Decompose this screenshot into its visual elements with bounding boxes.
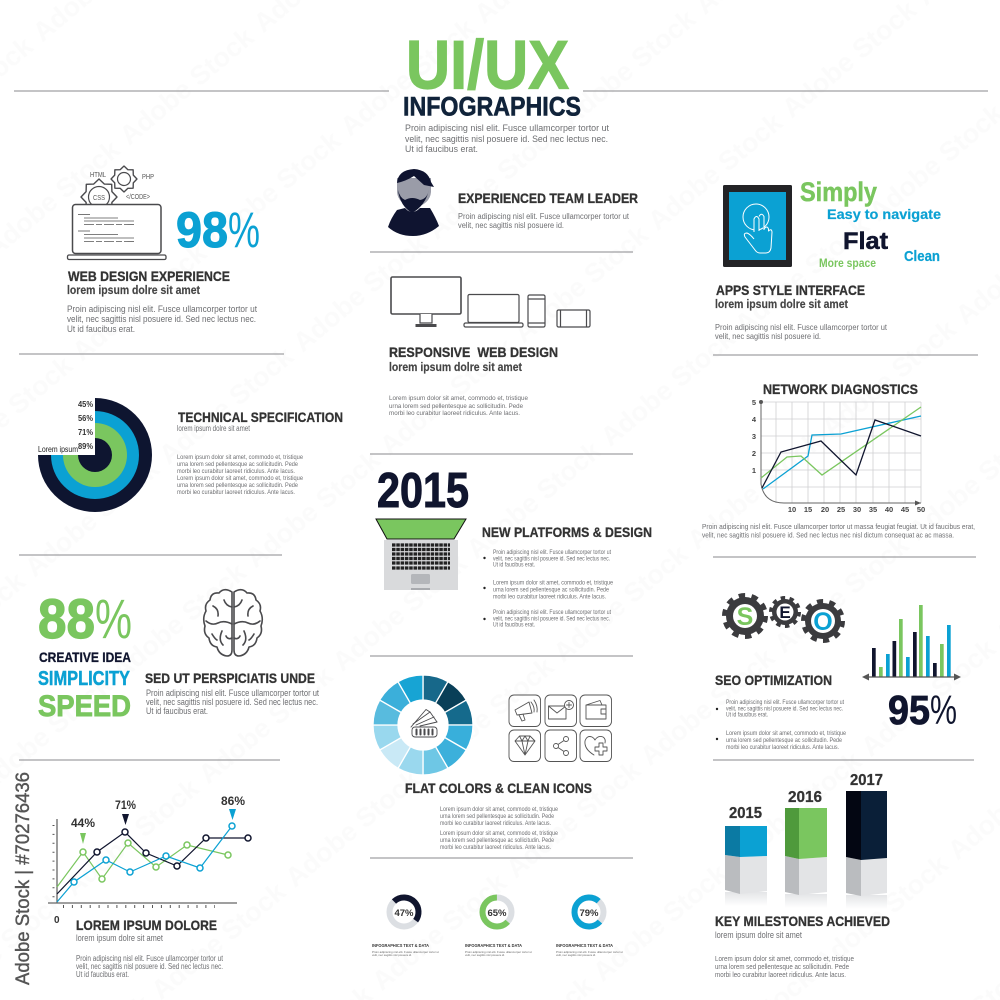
icon: devices: [391, 277, 590, 327]
intro text: velit, nec sagittis nisl posuere id. Sed nec lectus nec.: [405, 134, 608, 144]
ring: 47%: [372, 892, 439, 957]
heading: [715, 913, 890, 940]
text block: Lorem ipsum dolor sit amet, commodo et, tristique: [389, 395, 528, 402]
bullet list: [716, 700, 847, 751]
bullet list: Ut id faucibus erat.: [493, 562, 535, 568]
icon: mail plus: [545, 695, 576, 726]
line chart: [752, 398, 925, 514]
panel: creative stats: [38, 587, 319, 723]
bullet list: morbi leo curabitur laoreet ridiculus. Ante lacus.: [726, 745, 839, 751]
line chart: 45: [901, 505, 909, 514]
stat: 98%: %: [228, 202, 260, 258]
stat: 98%: [176, 202, 260, 258]
text block: Lorem ipsum dolor sit amet, commodo et, tristique: [715, 956, 854, 963]
word cloud: Clean: [904, 248, 940, 265]
icon: SEO gears: O: [813, 608, 833, 636]
year 2015: 2015: [377, 464, 469, 518]
line chart: 0: [54, 915, 60, 926]
panel: responsive web design: [389, 277, 590, 417]
icon: laptop with gears: CSS: [93, 195, 105, 202]
heading: lorem ipsum dolre sit amet: [67, 283, 200, 297]
word stack: SPEED: [38, 690, 131, 723]
icon: SEO gears: [724, 596, 842, 640]
word stack: SIMPLICITY: [38, 667, 130, 690]
line chart: 1: [752, 466, 756, 475]
bullet list: Ut id faucibus erat.: [493, 622, 535, 628]
text block: velit, nec sagittis nisl posuere id. Sed nec lectus nec nisl dictum consequat ac ac massa.: [702, 530, 954, 540]
icon: megaphone: [509, 695, 540, 726]
line chart: 86%: [221, 794, 245, 808]
text block: Proin adipiscing nisl elit. Fusce ullamcorper tortor ut: [458, 212, 630, 221]
bullet list: velit, nec sagittis nisl posuere id. Sed nec lectus nec.: [493, 616, 610, 622]
ring: 65%: [465, 891, 532, 957]
text block: urna lorem sed pellentesque ac sollicitudin. Pede: [715, 964, 849, 971]
icon: swatch fan: [411, 710, 437, 737]
bullet list: velit, nec sagittis nisl posuere id. Sed nec lectus nec.: [493, 556, 610, 562]
intro text: [405, 123, 609, 154]
text block: Ut id faucibus erat.: [67, 324, 135, 334]
panel: web design experience: [67, 166, 260, 334]
bullet list: velit, nec sagittis nisl posuere id. Sed nec lectus nec.: [726, 706, 843, 712]
line chart: 30: [853, 505, 861, 514]
radial chart: 56%: [78, 414, 93, 423]
text block: morbi leo curabitur laoreet ridiculus. Ante lacus.: [177, 468, 295, 475]
stat: 95%: 95: [888, 687, 930, 733]
icon: avatar: [388, 169, 439, 236]
icon: laptop with gears: [68, 166, 166, 260]
heading: EXPERIENCED TEAM LEADER: [458, 190, 638, 206]
word cloud: Flat: [843, 228, 888, 255]
text block: morbi leo curabitur laoreet ridiculus. Ante lacus.: [177, 489, 295, 496]
line chart: 71%: [115, 798, 136, 812]
heading: lorem ipsum dolre sit amet: [76, 933, 163, 943]
text block: urna lorem sed pellentesque ac sollicitudin. Pede: [440, 813, 554, 820]
icon: laptop with gears: </CODE>: [126, 194, 150, 201]
text block: [458, 212, 630, 230]
ring: 47%: Proin adipiscing nisl elit. Fusce ullamcorper tortor ut: [372, 950, 439, 954]
word stack: [38, 650, 131, 723]
stat: 88%: %: [95, 587, 132, 650]
panel: lorem ipsum dolore: [48, 794, 251, 979]
line chart: 44%: [71, 816, 95, 830]
text block: [440, 806, 558, 851]
radial chart: Lorem ipsum: [38, 445, 78, 454]
radial chart: 89%: [78, 442, 93, 451]
text block: [389, 395, 528, 417]
3D column: 2017: 2017: [850, 772, 883, 789]
ring: 47%: INFOGRAPHICS TEXT & DATA: [372, 943, 430, 948]
icon: share: [545, 730, 576, 762]
ring: 65%: 65%: [487, 908, 507, 919]
ring: 47%: velit, nec sagittis nisl posuere id.: [372, 953, 412, 957]
bullet list: Proin adipiscing nisl elit. Fusce ullamcorper tortor ut: [726, 700, 844, 706]
text block: Proin adipiscing nisl elit. Fusce ullamcorper tortor ut: [76, 954, 224, 963]
ring: 65%: Proin adipiscing nisl elit. Fusce ullamcorper tortor ut: [465, 950, 532, 954]
line chart: 10: [788, 505, 796, 514]
icon: heart plus: [580, 730, 612, 762]
intro text: Proin adipiscing nisl elit. Fusce ullamcorper tortor ut: [405, 123, 609, 133]
text block: Lorem ipsum dolor sit amet, commodo et, tristique: [440, 806, 558, 813]
panel: flat colors and clean icons: [367, 669, 612, 851]
text block: [715, 323, 888, 341]
word stack: CREATIVE IDEA: [39, 650, 131, 665]
ring: 65%: velit, nec sagittis nisl posuere id.: [465, 953, 505, 957]
heading: SED UT PERSPICIATIS UNDE: [145, 670, 315, 686]
text block: urna lorem sed pellentesque ac sollicitudin. Pede: [440, 837, 554, 844]
line chart: 4: [752, 415, 757, 424]
stat: 88%: [38, 587, 132, 650]
heading: TECHNICAL SPECIFICATION: [178, 409, 343, 425]
text block: [146, 688, 319, 716]
heading: lorem ipsum dolre sit amet: [177, 424, 251, 433]
3D column: 2016: [785, 789, 827, 908]
panel: key milestones: [715, 772, 890, 979]
icon: SEO gears: S: [737, 603, 753, 631]
heading: WEB DESIGN EXPERIENCE: [68, 268, 230, 284]
bullet list: [483, 550, 614, 628]
icon: laptop with gears: PHP: [142, 174, 154, 181]
radial chart: 45%: [78, 400, 93, 409]
heading: [389, 344, 558, 374]
heading: [67, 268, 230, 297]
line chart: 25: [837, 505, 845, 514]
text block: [177, 454, 303, 496]
line chart: [48, 794, 251, 926]
text block: Lorem ipsum dolor sit amet, commodo et, tristique: [177, 475, 303, 482]
intro text: Ut id faucibus erat.: [405, 144, 478, 154]
bullet list: urna lorem sed pellentesque ac sollicitudin. Pede: [726, 738, 843, 744]
stat: 88%: 88: [38, 587, 95, 650]
heading: lorem ipsum dolre sit amet: [715, 930, 802, 940]
3D column: 2015: [725, 805, 767, 906]
text block: morbi leo curabitur laoreet ridiculus. Ante lacus.: [715, 972, 846, 979]
radial chart: 71%: [78, 428, 93, 437]
panel: network diagnostics: [702, 381, 975, 540]
text block: velit, nec sagittis nisl posuere id. Sed nec lectus nec.: [146, 697, 318, 707]
line chart: 20: [821, 505, 829, 514]
text block: urna lorem sed pellentesque ac sollicitudin. Pede: [177, 461, 298, 468]
text block: Proin adipiscing nisl elit. Fusce ullamcorper tortor ut: [146, 688, 319, 698]
text block: velit, nec sagittis nisl posuere id. Sed nec lectus nec.: [67, 314, 256, 324]
heading: LOREM IPSUM DOLORE: [76, 917, 217, 933]
icon: open laptop: [376, 519, 466, 590]
stat: 98%: 98: [176, 202, 228, 258]
panel: experienced team leader: [388, 169, 638, 236]
text block: urna lorem sed pellentesque ac sollicitudin. Pede: [389, 403, 523, 410]
stat: 95%: [888, 687, 957, 733]
bar chart: [862, 605, 961, 680]
icon: wallet: [580, 695, 612, 726]
bullet list: Lorem ipsum dolor sit amet, commodo et, tristique: [493, 580, 614, 586]
panel: apps style interface: [715, 177, 941, 341]
bullet list: Proin adipiscing nisl elit. Fusce ullamcorper tortor ut: [493, 610, 611, 616]
heading: [76, 917, 217, 943]
title: INFOGRAPHICS: [403, 92, 581, 122]
text block: Lorem ipsum dolor sit amet, commodo et, tristique: [177, 454, 303, 461]
heading: NEW PLATFORMS & DESIGN: [482, 524, 652, 540]
bullet list: Proin adipiscing nisl elit. Fusce ullamcorper tortor ut: [493, 550, 611, 556]
bullet list: morbi leo curabitur laoreet ridiculus. Ante lacus.: [493, 594, 606, 600]
text block: morbi leo curabitur laoreet ridiculus. Ante lacus.: [440, 844, 551, 851]
word cloud: Simply: [800, 177, 877, 207]
heading: [715, 282, 865, 311]
line chart: 40: [885, 505, 893, 514]
text block: [702, 522, 975, 540]
heading: lorem ipsum dolre sit amet: [715, 297, 848, 311]
ring: 79%: INFOGRAPHICS TEXT & DATA: [556, 943, 614, 948]
text block: Ut id faucibus erat.: [146, 706, 208, 716]
heading: NETWORK DIAGNOSTICS: [763, 381, 918, 397]
ring: 79%: velit, nec sagittis nisl posuere id.: [556, 953, 596, 957]
heading: SEO OPTIMIZATION: [715, 672, 832, 688]
heading: [177, 409, 343, 433]
text block: [67, 304, 257, 334]
ring: 47%: 47%: [394, 908, 414, 919]
heading: KEY MILESTONES ACHIEVED: [715, 913, 890, 929]
text block: Proin adipiscing nisl elit. Fusce ullamcorper tortor ut: [67, 304, 257, 314]
3D column: 2015: 2015: [729, 805, 762, 822]
line chart: 50: [917, 505, 925, 514]
heading: lorem ipsum dolre sit amet: [389, 360, 522, 374]
line chart: 2: [752, 449, 756, 458]
text block: Ut id faucibus erat.: [76, 970, 129, 979]
heading: APPS STYLE INTERFACE: [716, 282, 865, 298]
title: UI/UX: [406, 26, 569, 104]
ring: 79%: Proin adipiscing nisl elit. Fusce ullamcorper tortor ut: [556, 950, 623, 954]
heading: RESPONSIVE WEB DESIGN: [389, 344, 558, 360]
heading: FLAT COLORS & CLEAN ICONS: [405, 780, 592, 796]
ring: 79%: 79%: [579, 908, 599, 919]
text block: [76, 954, 224, 979]
radial chart: [36, 396, 152, 512]
icon: laptop with gears: HTML: [90, 172, 106, 179]
icon: brain: [204, 590, 262, 656]
panel: new platforms and design: [376, 464, 652, 628]
panel: seo optimization: [715, 596, 961, 751]
word cloud: [800, 177, 941, 270]
text block: velit, nec sagittis nisl posuere id.: [715, 332, 821, 341]
line chart: 35: [869, 505, 877, 514]
icon: SEO gears: E: [779, 603, 791, 622]
line chart: 15: [804, 505, 812, 514]
text block: velit, nec sagittis nisl posuere id.: [458, 221, 564, 230]
text block: Proin adipiscing nisl elit. Fusce ullamcorper tortor ut: [715, 323, 888, 332]
stat: 95%: %: [930, 687, 957, 733]
text block: urna lorem sed pellentesque ac sollicitudin. Pede: [177, 482, 298, 489]
bullet list: urna lorem sed pellentesque ac sollicitudin. Pede: [493, 588, 610, 594]
icon: tablet with touch hand: [723, 185, 792, 267]
word cloud: Easy to navigate: [827, 206, 941, 222]
text block: morbi leo curabitur laoreet ridiculus. Ante lacus.: [440, 820, 551, 827]
text block: velit, nec sagittis nisl posuere id. Sed nec lectus nec.: [76, 962, 223, 971]
icon grid: [509, 695, 612, 762]
bullet list: Ut id faucibus erat.: [726, 712, 768, 718]
ring: 79%: [556, 892, 623, 957]
stock id label: Adobe Stock | #70276436: [13, 772, 34, 985]
bullet list: Lorem ipsum dolor sit amet, commodo et, tristique: [726, 731, 847, 737]
panel: progress rings: [372, 891, 623, 957]
text block: [715, 956, 854, 979]
word cloud: More space: [819, 258, 876, 270]
line chart: 3: [752, 432, 756, 441]
ring: 65%: INFOGRAPHICS TEXT & DATA: [465, 943, 523, 948]
icon: diamond: [509, 730, 540, 762]
panel: technical specification: [36, 396, 343, 512]
3D column: 2017: [846, 772, 887, 909]
color wheel: [367, 669, 479, 781]
text block: morbi leo curabitur laoreet ridiculus. Ante lacus.: [389, 410, 520, 417]
line chart: 5: [752, 398, 756, 407]
text block: Lorem ipsum dolor sit amet, commodo et, tristique: [440, 830, 558, 837]
3D column: 2016: 2016: [788, 789, 822, 806]
